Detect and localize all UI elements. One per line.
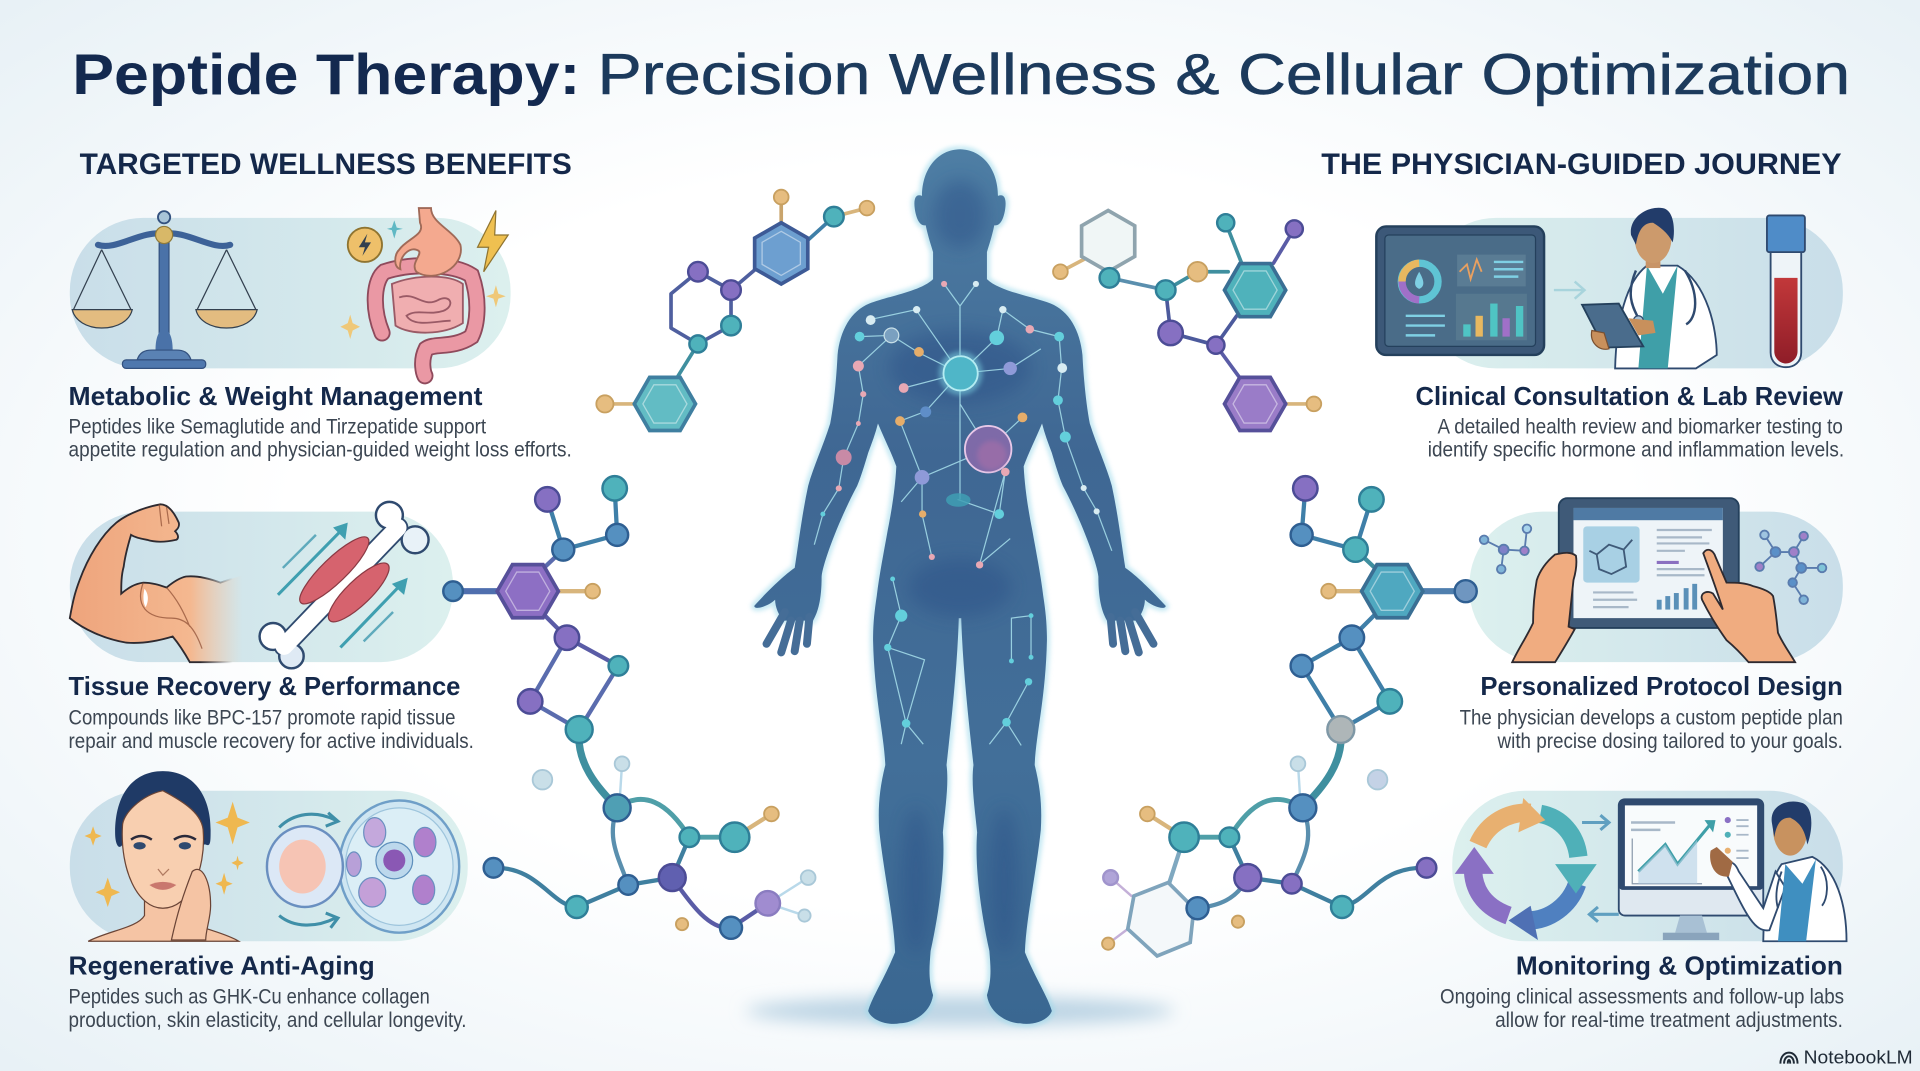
description [69, 415, 572, 462]
icon: blood test tube [1767, 215, 1805, 367]
panel: metabolic and weight management [69, 208, 572, 462]
pill background [70, 512, 453, 662]
description: with precise dosing tailored to your goals. [1497, 730, 1843, 753]
panel: monitoring and optimization [1440, 791, 1847, 1032]
heading: Tissue Recovery & Performance [69, 673, 460, 701]
heading: Metabolic & Weight Management [69, 383, 483, 411]
pill background [1469, 512, 1843, 662]
icon: stomach and intestines [340, 208, 508, 376]
heading: the physician-guided journey: THE PHYSICIAN-GUIDED JOURNEY [1321, 148, 1842, 181]
description: appetite regulation and physician-guided weight loss efforts. [69, 439, 572, 462]
icon: small molecule right [1755, 531, 1826, 604]
description: Compounds like BPC-157 promote rapid tissue [69, 707, 456, 730]
description [1460, 707, 1843, 753]
central human body figure [746, 149, 1174, 1026]
description: production, skin elasticity, and cellular longevity. [69, 1009, 467, 1032]
icon: cells [267, 800, 459, 933]
heading: targeted wellness benefits: TARGETED WELLNESS BENEFITS [80, 148, 572, 181]
molecule: top left [596, 190, 874, 430]
icon: bone and muscle [260, 502, 429, 668]
description [69, 707, 474, 753]
icon: small molecule left [1480, 524, 1531, 573]
network nodes [820, 281, 1100, 728]
description [1428, 415, 1844, 462]
icon: lab dashboard [1376, 226, 1584, 355]
description: The physician develops a custom peptide plan [1460, 707, 1843, 730]
panel: clinical consultation and lab review [1376, 208, 1844, 462]
icon: cycle arrows [1455, 798, 1597, 940]
description: Peptides such as GHK-Cu enhance collagen [69, 986, 430, 1009]
heading: Clinical Consultation & Lab Review [1416, 383, 1844, 411]
description: repair and muscle recovery for active individuals. [69, 730, 474, 753]
description: A detailed health review and biomarker testing to [1438, 415, 1843, 438]
icon: balance scale [72, 211, 257, 368]
title [72, 43, 1850, 107]
icon: doctor with tablet [1582, 208, 1717, 368]
icon: woman's face [84, 771, 250, 941]
icon: doctor presenting [1710, 801, 1847, 941]
description [69, 986, 467, 1032]
panel: tissue recovery and performance [69, 502, 474, 753]
notebooklm watermark: NotebookLM [1804, 1047, 1913, 1068]
heading: Personalized Protocol Design [1480, 673, 1843, 701]
icon: flexed arm [70, 504, 242, 662]
body shading [889, 180, 1031, 955]
description: allow for real-time treatment adjustments. [1495, 1009, 1843, 1032]
panel: personalized protocol design [1460, 498, 1843, 753]
heading: Monitoring & Optimization [1516, 952, 1843, 980]
heading: Regenerative Anti-Aging [69, 952, 375, 980]
title: Peptide Therapy: [72, 43, 580, 107]
description: Peptides like Semaglutide and Tirzepatide support [69, 415, 486, 438]
icon: monitor with chart [1619, 799, 1763, 940]
description: Ongoing clinical assessments and follow-up labs [1440, 986, 1844, 1009]
description [1440, 986, 1844, 1032]
panel: regenerative anti-aging [69, 771, 468, 1032]
icon: small arrows [1582, 815, 1619, 922]
molecule: mid right chain [1102, 476, 1477, 956]
title: Precision Wellness & Cellular Optimization [598, 43, 1850, 107]
molecule: mid left chain [443, 476, 816, 939]
ground shadow [746, 996, 1174, 1026]
neural network lines [814, 284, 1112, 745]
pill background [70, 791, 468, 941]
icon: tablet with hands [1512, 498, 1795, 662]
pill background [70, 218, 511, 368]
molecule: top right [1053, 211, 1321, 430]
pill background [1423, 218, 1843, 368]
pill background [1452, 791, 1843, 941]
description: identify specific hormone and inflammation levels. [1428, 439, 1844, 462]
body silhouette [754, 149, 1166, 1024]
